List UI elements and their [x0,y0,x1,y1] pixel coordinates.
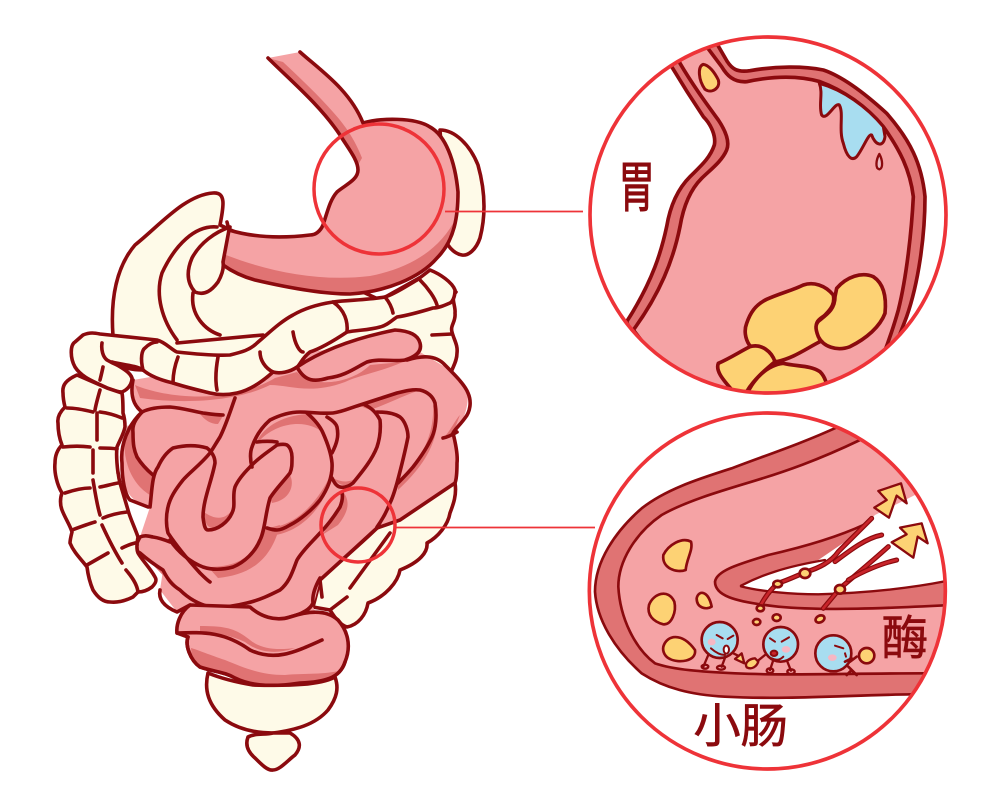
lower right cream colon [313,483,456,627]
vessels [760,518,897,608]
intestine wall [596,429,922,696]
bottom cream tip [247,733,299,770]
food chunk [816,275,885,349]
upper intestine lobe [297,330,420,380]
spleen [440,130,484,255]
upper left cream lobe [188,227,230,293]
back cream organ mass [112,193,457,400]
circle frame [590,37,946,393]
food droplet [699,64,719,91]
panel: stomach close-up [590,37,946,403]
transverse colon [71,270,455,394]
gap between folds [741,495,955,594]
ascending colon [55,375,156,602]
food chunk [750,362,828,392]
rectum folds [177,605,348,685]
stomach wall [626,46,927,342]
intestine close-up art [595,425,955,698]
circle frame [589,413,945,769]
bottom cream pouch [207,673,337,733]
intestine loop outlines [122,357,470,620]
intestine interior [618,438,952,674]
food chunk [745,284,834,362]
food chunk [718,346,775,392]
small intestine base [122,340,468,625]
connector line to small intestine [395,526,595,528]
acid drop [876,154,882,169]
small intestine highlight ring [321,488,395,562]
enzyme label: 酶 [882,612,928,665]
inner fold wall [716,529,944,608]
nutrient arrow [892,523,928,558]
enzyme character [815,635,857,675]
food particles [649,540,874,663]
panel: small intestine close-up [589,413,955,769]
vessel nodes [773,569,845,594]
stomach highlight ring [314,124,444,254]
digestive organs illustration [55,52,484,770]
connector line to stomach [445,210,583,212]
small intestine label: 小肠 [693,700,788,753]
nutrient arrow [874,483,907,518]
enzyme character [702,622,744,670]
gastric acid [819,83,885,159]
stomach interior [633,47,913,403]
stomach close-up art [627,43,925,403]
enzyme character [746,627,798,674]
stomach label: 胃 [618,157,655,219]
stomach [223,52,458,294]
small intestine shading [124,332,460,593]
